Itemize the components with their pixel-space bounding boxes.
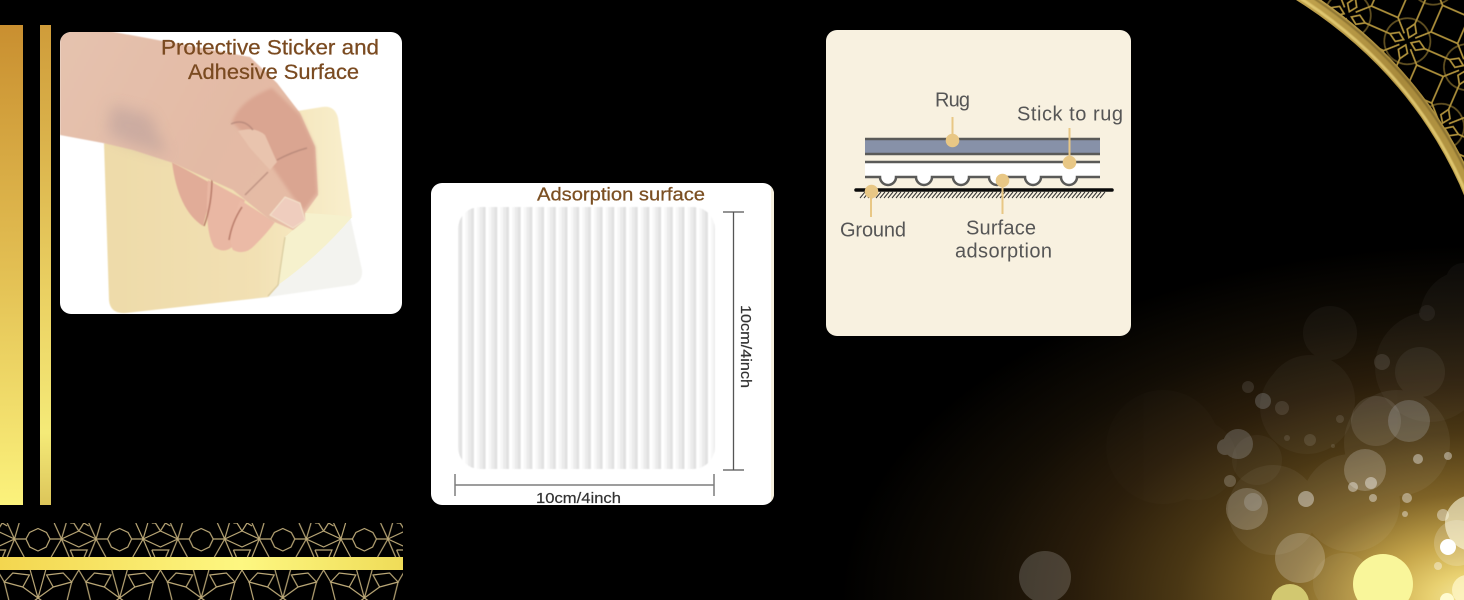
finger gaps — [204, 177, 242, 240]
fingers — [172, 162, 275, 252]
diagram labels: Stick to rug — [1017, 104, 1123, 126]
diagram labels: Ground — [840, 220, 906, 242]
layer lines — [865, 139, 1100, 162]
suction cups — [865, 177, 1100, 185]
ground hatch — [860, 192, 1105, 198]
shaded wrist creases — [108, 105, 168, 155]
height label: 10cm/4inch — [737, 305, 754, 388]
bokeh circles — [1019, 263, 1464, 600]
pad layer — [865, 162, 1100, 177]
diagram labels: Rug — [935, 90, 970, 112]
corner gold arc — [1295, 0, 1464, 208]
heading: protective sticker: Adhesive Surface — [188, 61, 359, 84]
ribbed pad — [458, 207, 715, 469]
hand and thumb — [60, 30, 318, 230]
panel: rug diagram — [826, 30, 1131, 336]
backing pad — [269, 219, 362, 297]
thumbnail — [270, 197, 305, 228]
golden glow — [840, 245, 1464, 600]
callout markers — [865, 117, 1076, 217]
corner geometric pattern — [1326, 0, 1464, 158]
knuckle creases — [231, 122, 307, 195]
width label: 10cm/4inch — [536, 490, 621, 507]
heading: protective sticker: Protective Sticker and — [161, 36, 379, 60]
heading: adsorption surface: Adsorption surface — [537, 184, 705, 204]
diagram labels: adsorption — [955, 240, 1052, 262]
diagram labels: Surface — [966, 218, 1036, 240]
height dimension line — [723, 212, 744, 470]
left gold bar narrow — [40, 25, 51, 505]
cream protective sticker — [104, 107, 352, 313]
bottom gold stripe — [0, 557, 403, 570]
panel: adsorption surface — [431, 183, 774, 507]
rug layer — [865, 139, 1100, 154]
index finger shading — [232, 88, 317, 210]
left gold bar wide — [0, 25, 23, 505]
heading: protective sticker — [162, 38, 378, 80]
width dimension line — [455, 474, 714, 496]
curl edge shadow — [268, 237, 285, 296]
bottom geometric band — [0, 523, 403, 600]
diagram labels — [840, 90, 1123, 262]
panel: protective sticker photo — [60, 30, 402, 314]
peeled corner — [278, 213, 352, 285]
finger behind thumb — [238, 129, 277, 170]
ground line — [856, 188, 1112, 192]
